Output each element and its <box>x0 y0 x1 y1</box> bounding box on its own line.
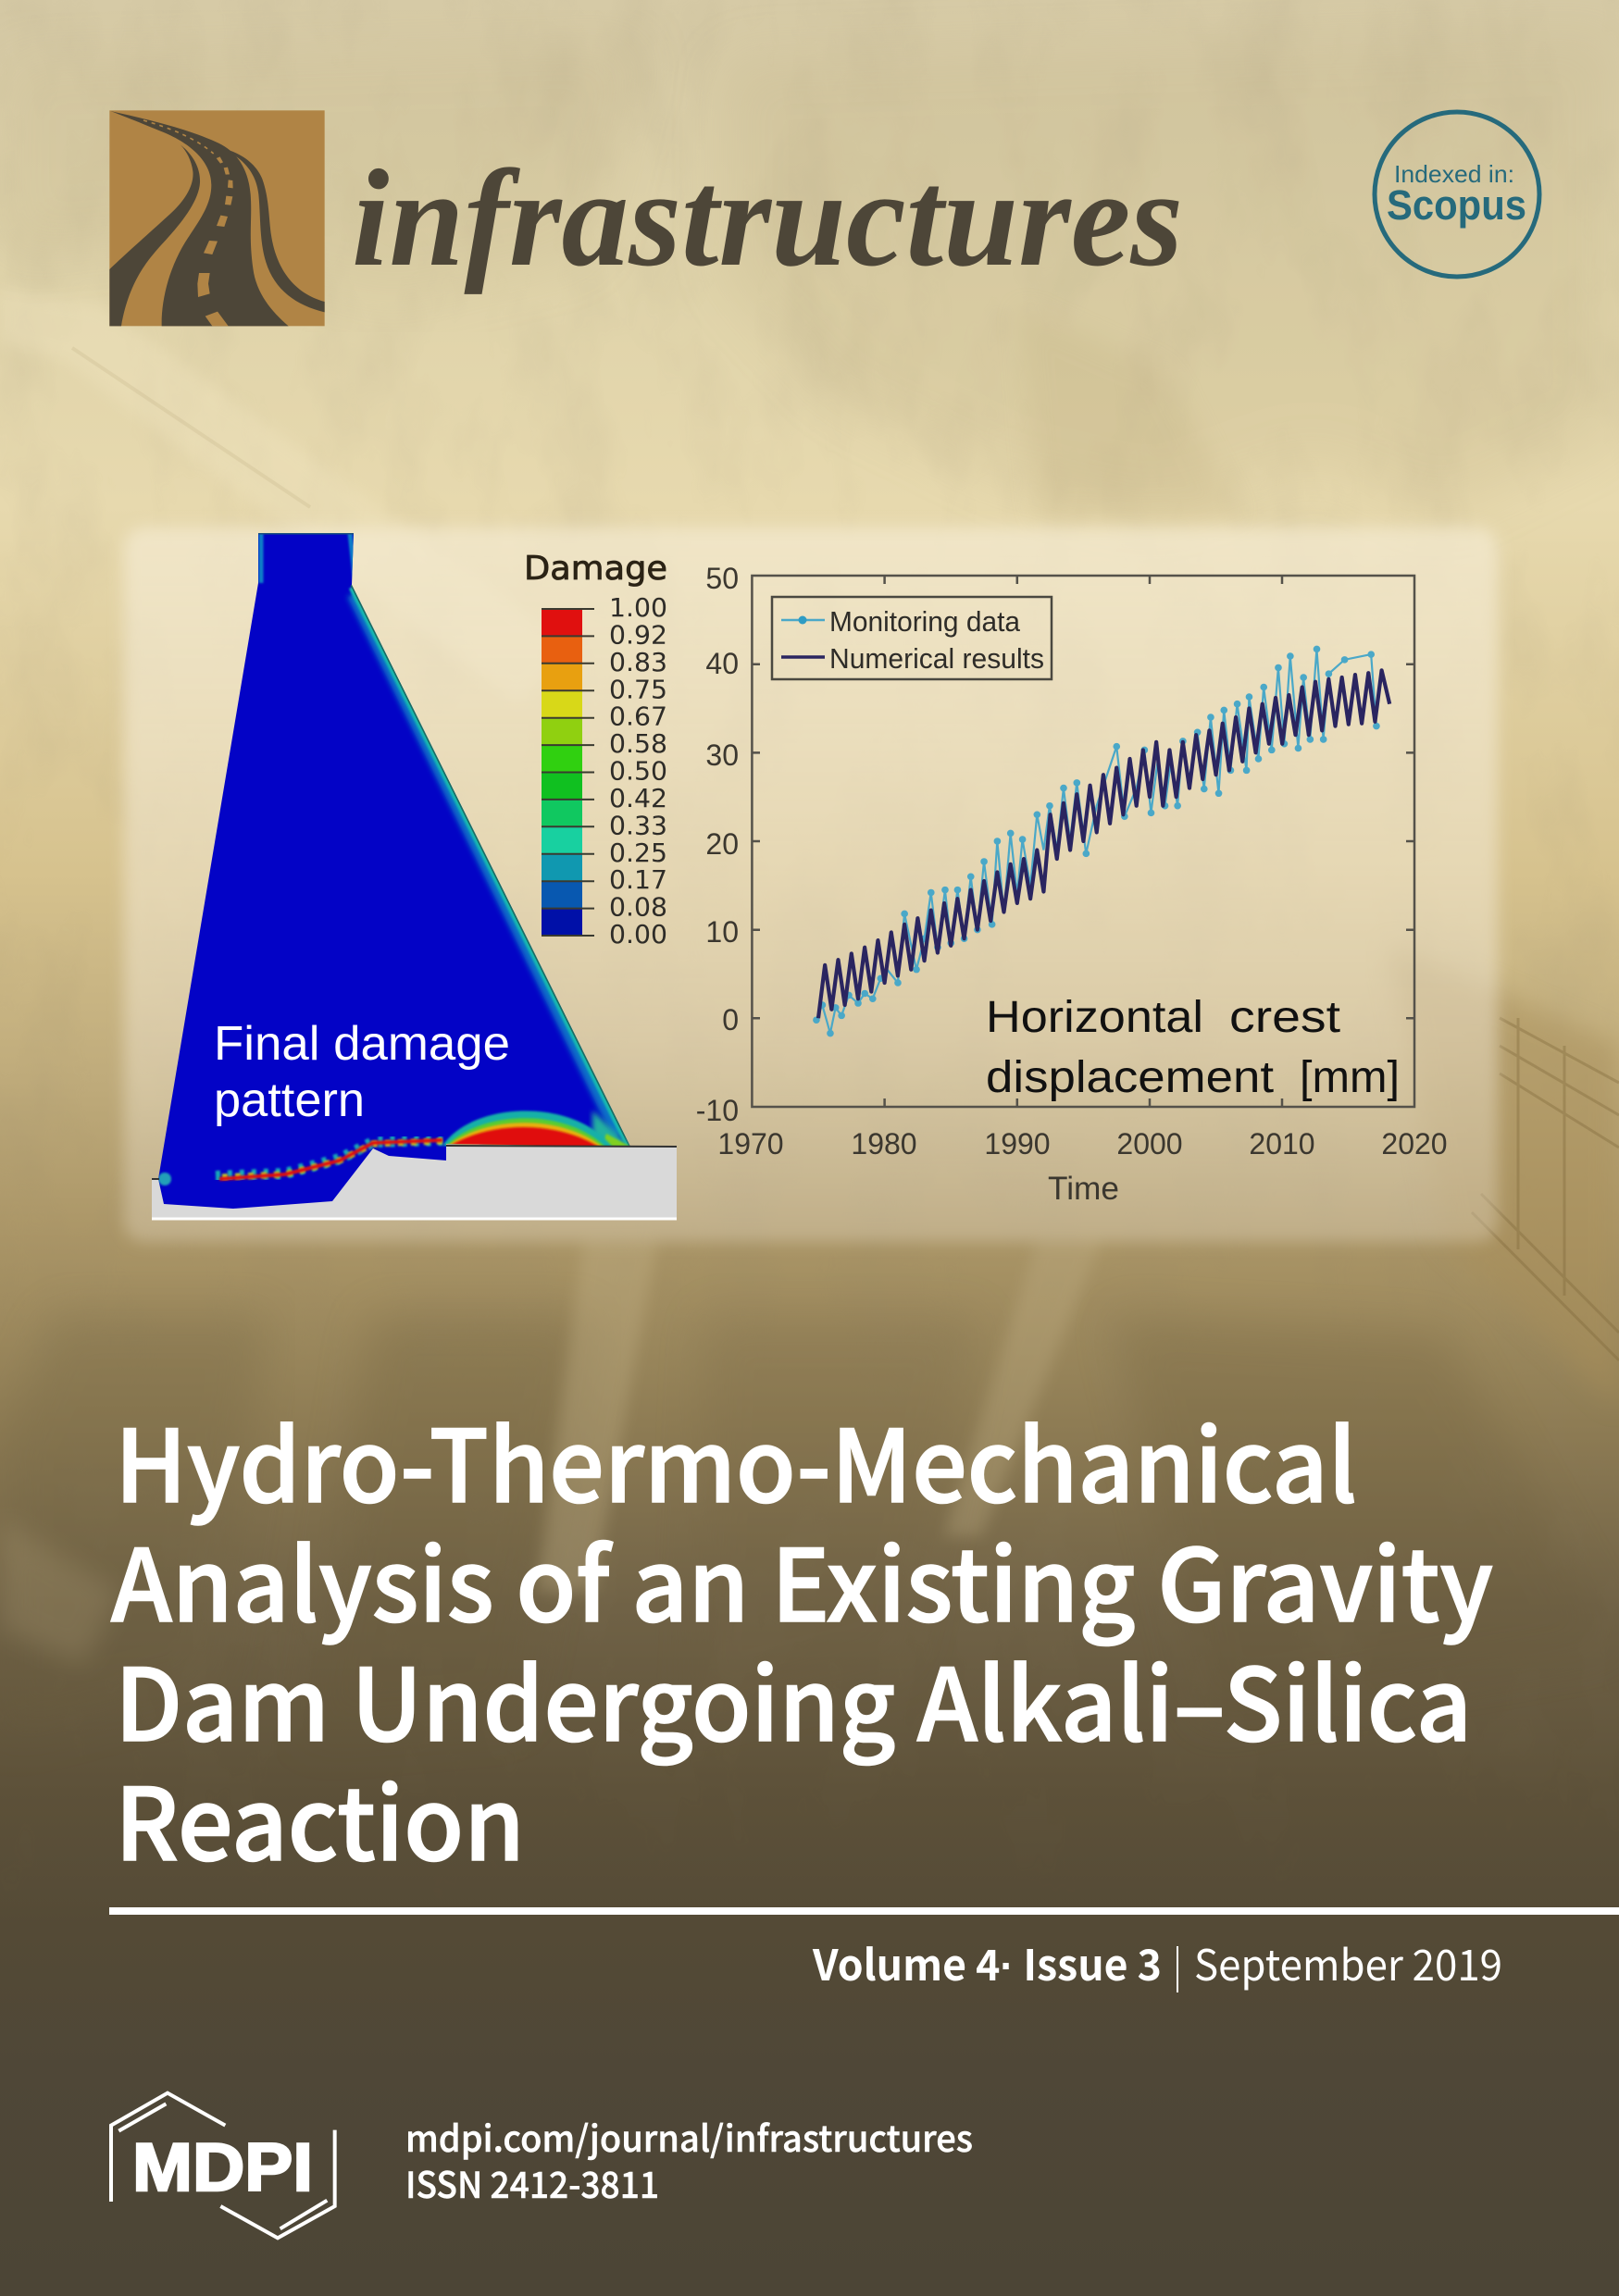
x axis labels: 2010 <box>1249 1127 1315 1160</box>
issue information <box>812 1932 1502 1993</box>
title rule <box>109 1907 1619 1915</box>
icon: MDPI logo: MDPI <box>132 2130 313 2205</box>
x axis labels: 1970 <box>717 1127 784 1160</box>
dam body <box>158 533 630 1209</box>
chart annotation: displacement <box>986 1053 1274 1102</box>
panel: dam damage model <box>152 533 677 1219</box>
icon: MDPI logo <box>111 2093 335 2238</box>
badge: indexed in Scopus: Scopus <box>1387 181 1526 229</box>
x axis labels: 2000 <box>1116 1127 1183 1160</box>
x axis labels: 1990 <box>984 1127 1051 1160</box>
damage pattern label: pattern <box>214 1074 365 1127</box>
colour bar values: 0.58 <box>609 728 667 759</box>
legend: damage scale <box>524 550 667 949</box>
title: Hydro-Thermo-Mechanical <box>115 1387 1357 1532</box>
chart annotation <box>986 993 1400 1102</box>
y axis labels: 10 <box>705 915 739 949</box>
y axis labels: 20 <box>705 827 739 861</box>
icon: journal road logo <box>109 110 325 326</box>
colour bar values: 0.67 <box>609 701 667 732</box>
y axis labels: 40 <box>705 647 739 680</box>
colour bar values: 0.08 <box>609 892 667 923</box>
colour bar values: 0.33 <box>609 810 667 840</box>
colour bar values: 0.50 <box>609 755 667 787</box>
badge: indexed in Scopus: Indexed in: <box>1394 160 1514 188</box>
chart frame and ticks <box>752 576 1414 1107</box>
damage contours clipped to dam <box>158 533 630 1185</box>
y axis labels: 30 <box>705 738 739 772</box>
colour bar values: 0.25 <box>609 838 667 868</box>
damage pattern label: Final damage <box>214 1017 510 1071</box>
colour bar values: 0.17 <box>609 864 667 895</box>
colour bar values: 0.75 <box>609 674 667 704</box>
title <box>111 1387 1493 1890</box>
colour bar <box>542 609 594 936</box>
chart legend <box>772 597 1052 679</box>
x axis labels: 2020 <box>1381 1127 1448 1160</box>
title: Dam Undergoing Alkali–Silica <box>115 1626 1472 1770</box>
chart annotation: [mm] <box>1300 1053 1400 1102</box>
title: Analysis of an Existing Gravity <box>111 1507 1493 1651</box>
x axis labels <box>717 1127 1448 1160</box>
series: monitoring data <box>816 649 1376 1034</box>
issue information: Volume 4· Issue 3 <box>812 1932 1162 1993</box>
light panel behind charts <box>124 527 1498 1242</box>
colour bar values: 0.92 <box>609 619 667 650</box>
damage pattern label <box>214 1017 510 1127</box>
x axis labels: 1980 <box>851 1127 917 1160</box>
colour bar values: 0.83 <box>609 647 667 677</box>
y axis labels: -10 <box>696 1094 739 1127</box>
journal name: infrastructures <box>352 142 1183 295</box>
colour bar values: 1.00 <box>609 592 667 623</box>
y axis labels: 50 <box>705 562 739 595</box>
journal url and ISSN <box>405 2111 973 2209</box>
title: Reaction <box>115 1745 525 1890</box>
journal url and ISSN: mdpi.com/journal/infrastructures <box>405 2111 973 2163</box>
chart legend: Numerical results <box>829 642 1044 675</box>
colour bar values <box>609 592 667 949</box>
series: numerical results <box>818 670 1389 1018</box>
chart annotation: crest <box>1229 993 1340 1042</box>
chart legend: Monitoring data <box>829 605 1021 638</box>
line chart: horizontal crest displacement <box>696 562 1448 1207</box>
issue information: September 2019 <box>1194 1932 1502 1993</box>
journal url and ISSN: ISSN 2412-3811 <box>405 2157 659 2209</box>
legend heading: Damage <box>524 550 667 588</box>
colour bar values: 0.42 <box>609 783 667 813</box>
x axis title: Time <box>1048 1171 1119 1207</box>
colour bar values: 0.00 <box>609 919 667 949</box>
y axis labels: 0 <box>722 1003 739 1036</box>
chart annotation: Horizontal <box>986 993 1203 1042</box>
y axis labels <box>696 562 739 1127</box>
foundation ground <box>152 1146 677 1218</box>
badge: indexed in Scopus <box>1375 112 1539 277</box>
ground line <box>152 1146 677 1179</box>
